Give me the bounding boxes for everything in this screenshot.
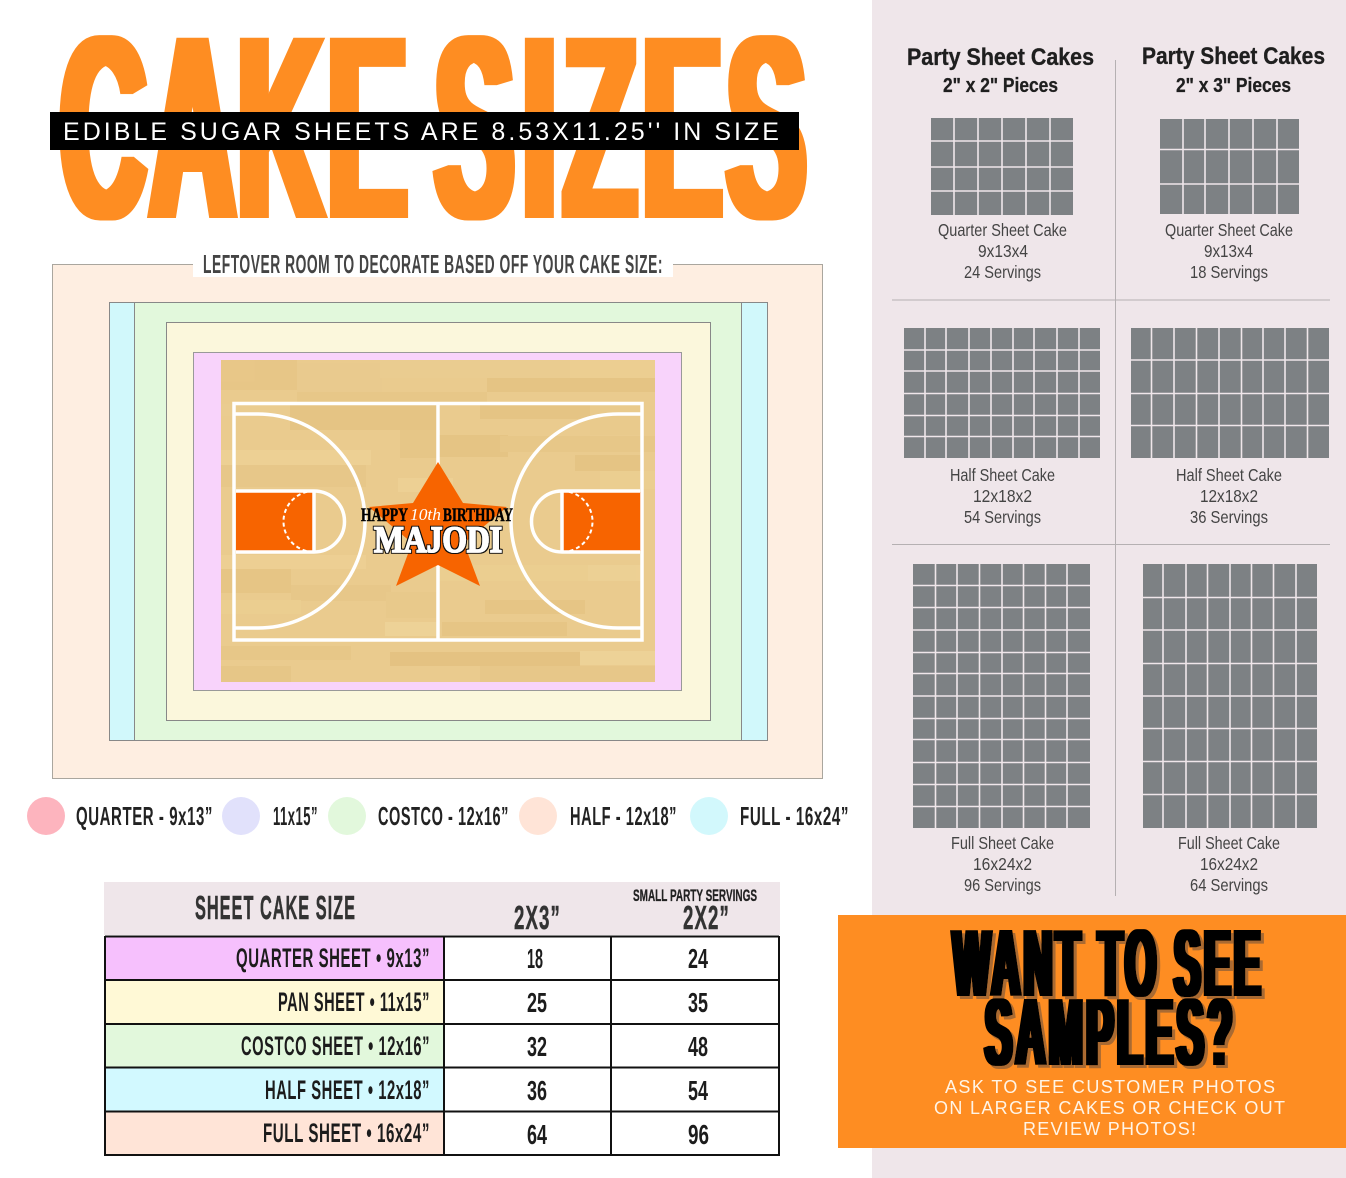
row label: full: FULL SHEET • 16x24” xyxy=(263,1118,430,1148)
legend label: quarter: QUARTER - 9x13” xyxy=(76,801,213,831)
callout body: ASK TO SEE CUSTOMER PHOTOS xyxy=(945,1077,1275,1097)
court lines xyxy=(234,403,642,640)
diagram: quarter 2x3 xyxy=(1160,119,1299,214)
caption: quarter 2x2 xyxy=(938,220,1067,282)
caption: half 2x3 xyxy=(1176,465,1282,527)
panel: nested cake size diagram xyxy=(52,264,822,778)
heading: 2x3 column: Party Sheet Cakes xyxy=(1142,43,1325,70)
heading text: LEFTOVER ROOM TO DECORATE BASED OFF YOUR CAKE SIZE: xyxy=(203,249,663,279)
caption: half 2x2 xyxy=(950,465,1055,527)
diagram: quarter 2x2 xyxy=(931,118,1073,215)
heading: 2x2 column: Party Sheet Cakes xyxy=(907,44,1094,71)
banner: edible sugar sheets size xyxy=(50,112,799,150)
basketball court sugar sheet xyxy=(221,360,655,682)
banner text: EDIBLE SUGAR SHEETS ARE 8.53X11.25'' IN SIZE xyxy=(63,118,779,146)
birthday text: HAPPY xyxy=(361,505,408,526)
callout: want to see samples xyxy=(838,910,1346,1148)
legend swatch: pan xyxy=(222,797,260,835)
row fill: quarter xyxy=(105,937,444,980)
heading: leftover room xyxy=(193,249,673,279)
costco sheet outline xyxy=(134,302,742,740)
row fill: full xyxy=(105,1112,444,1155)
table grid xyxy=(105,936,779,1156)
value: 18 xyxy=(527,943,543,974)
caption: half 2x2: 12x18x2 xyxy=(973,486,1032,506)
value: 25 xyxy=(527,987,547,1018)
legend label: costco: COSTCO - 12x16” xyxy=(378,801,509,831)
caption: quarter 2x3: 9x13x4 xyxy=(1204,241,1253,261)
caption: half 2x3: Half Sheet Cake xyxy=(1176,465,1282,485)
center star xyxy=(369,462,507,586)
table: servings by sheet cake size xyxy=(104,882,780,1156)
name: MAJODI xyxy=(374,520,502,561)
paint: left key xyxy=(236,492,314,552)
caption: full 2x2: 96 Servings xyxy=(964,875,1041,895)
callout heading xyxy=(953,910,1264,1086)
row fill: pan xyxy=(105,980,444,1024)
subheading: 2x2 pieces: 2" x 2" Pieces xyxy=(943,75,1058,97)
row fill: costco xyxy=(105,1024,444,1068)
row label: costco: COSTCO SHEET • 12x16” xyxy=(241,1031,430,1061)
legend swatch: half xyxy=(519,797,557,835)
diagram: full 2x3 xyxy=(1143,564,1317,828)
diagram: full 2x2 xyxy=(913,564,1090,828)
caption: half 2x3: 12x18x2 xyxy=(1200,486,1258,506)
value: 64 xyxy=(527,1119,547,1150)
caption: full 2x2: 16x24x2 xyxy=(973,854,1032,874)
row label: half: HALF SHEET • 12x18” xyxy=(265,1075,430,1105)
table: servings by sheet cake size: SHEET CAKE SIZE xyxy=(195,889,356,926)
legend swatch: full xyxy=(690,797,728,835)
full sheet outline xyxy=(110,302,768,740)
caption: full 2x3: 64 Servings xyxy=(1190,875,1268,895)
caption: full 2x3 xyxy=(1178,833,1280,895)
caption: full 2x3: 16x24x2 xyxy=(1200,854,1258,874)
caption: half 2x3: 36 Servings xyxy=(1190,507,1268,527)
legend label: half: HALF - 12x18” xyxy=(570,801,677,831)
legend label: full: FULL - 16x24” xyxy=(740,801,849,831)
caption: quarter 2x2: 24 Servings xyxy=(964,262,1041,282)
caption: full 2x2 xyxy=(951,833,1054,895)
value: 35 xyxy=(688,987,708,1018)
diagram: half 2x3 xyxy=(1131,328,1329,458)
quarter sheet outline xyxy=(194,352,682,690)
row label: quarter: QUARTER SHEET • 9x13” xyxy=(236,943,430,973)
value: 32 xyxy=(527,1031,547,1062)
legend swatch: costco xyxy=(328,797,366,835)
value: 96 xyxy=(688,1119,709,1150)
callout body: REVIEW PHOTOS! xyxy=(1023,1119,1196,1139)
panel: right column background xyxy=(872,0,1346,1178)
legend xyxy=(27,797,849,835)
caption: half 2x2: Half Sheet Cake xyxy=(950,465,1055,485)
caption: quarter 2x3: Quarter Sheet Cake xyxy=(1165,220,1293,240)
caption: half 2x2: 54 Servings xyxy=(964,507,1041,527)
age text: 10th xyxy=(410,505,441,524)
callout body: ON LARGER CAKES OR CHECK OUT xyxy=(934,1098,1285,1118)
row fill: half xyxy=(105,1068,444,1112)
pan sheet outline xyxy=(166,322,710,720)
paint: right key xyxy=(562,492,641,551)
value: 36 xyxy=(527,1075,547,1106)
birthday word: BIRTHDAY xyxy=(443,505,513,526)
value: 48 xyxy=(688,1031,708,1062)
panel: party sheet cakes xyxy=(892,43,1330,896)
value: 24 xyxy=(688,943,708,974)
caption: full 2x3: Full Sheet Cake xyxy=(1178,833,1280,853)
caption: quarter 2x2: Quarter Sheet Cake xyxy=(938,220,1067,240)
value: 54 xyxy=(688,1075,708,1106)
callout body xyxy=(934,1077,1285,1139)
caption: quarter 2x3: 18 Servings xyxy=(1190,262,1268,282)
diagram: half 2x2 xyxy=(904,328,1100,458)
table header: 2x3: 2X3” xyxy=(514,899,561,936)
caption: quarter 2x3 xyxy=(1165,220,1293,282)
legend label: pan: 11x15” xyxy=(273,801,318,831)
birthday text xyxy=(361,505,513,561)
caption: full 2x2: Full Sheet Cake xyxy=(951,833,1054,853)
caption: quarter 2x2: 9x13x4 xyxy=(978,241,1028,261)
table header: small party servings: SMALL PARTY SERVINGS xyxy=(633,886,757,905)
table header: 2x2: 2X2” xyxy=(683,899,730,936)
row label: pan: PAN SHEET • 11x15” xyxy=(278,987,430,1017)
subheading: 2x3 pieces: 2" x 3" Pieces xyxy=(1176,75,1291,97)
